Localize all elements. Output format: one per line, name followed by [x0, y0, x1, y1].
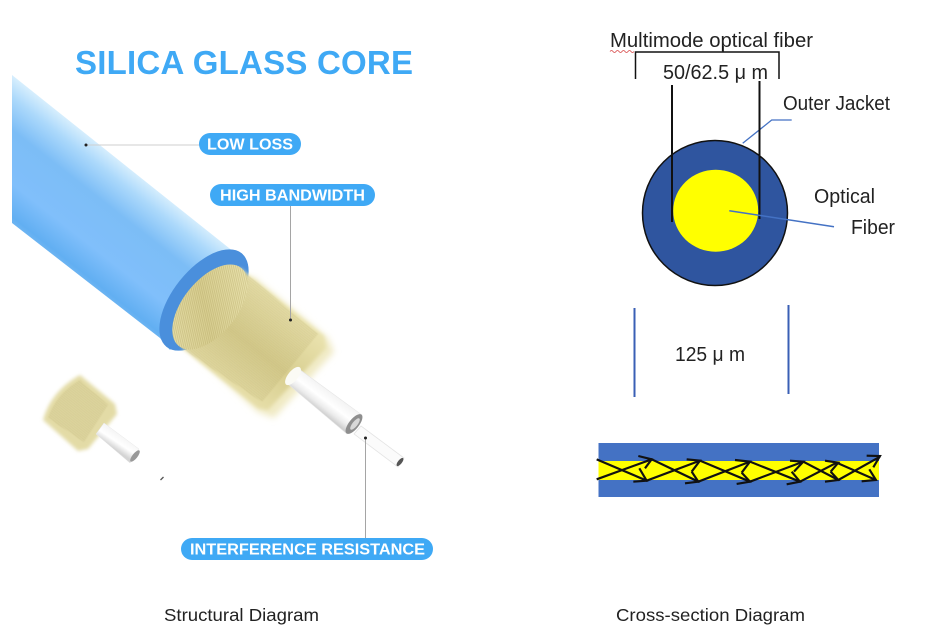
panel: structural diagram: [12, 75, 433, 560]
panel: cross-section diagram: [597, 30, 895, 497]
callout: interference resistance: [181, 436, 433, 560]
caption: cross-section diagram: Cross-section Diagram: [616, 605, 805, 625]
icon: fiber cross-section: [642, 81, 834, 286]
icon: aramid yarn: [158, 251, 334, 418]
label: fiber: Fiber: [851, 217, 895, 239]
label: outer jacket: Outer Jacket: [783, 93, 890, 115]
caption: structural diagram: Structural Diagram: [164, 605, 319, 625]
title: SILICA GLASS CORE: [75, 44, 413, 81]
icon: white buffer tube: [282, 364, 365, 436]
icon: outer tube: [12, 75, 266, 366]
callout: low loss: LOW LOSS: [207, 136, 293, 154]
leader: outer jacket: [743, 120, 792, 143]
callout: interference resistance: INTERFERENCE RESISTANCE: [190, 542, 425, 558]
callout: low loss: [84, 133, 301, 155]
label: optical: Optical: [814, 186, 875, 208]
label: core diameter: 50/62.5 μ m: [663, 62, 768, 84]
dimension: 125 um: 125 μ m: [675, 344, 745, 366]
icon: small yarn piece: [43, 375, 164, 480]
label: multimode optical fiber: Multimode optical fiber: [610, 30, 813, 52]
icon: fiber longitudinal section: [597, 443, 880, 497]
callout: high bandwidth: HIGH BANDWIDTH: [220, 188, 365, 204]
bracket: [636, 46, 779, 79]
icon: glass core: [354, 426, 405, 467]
callout: high bandwidth: [210, 184, 375, 322]
